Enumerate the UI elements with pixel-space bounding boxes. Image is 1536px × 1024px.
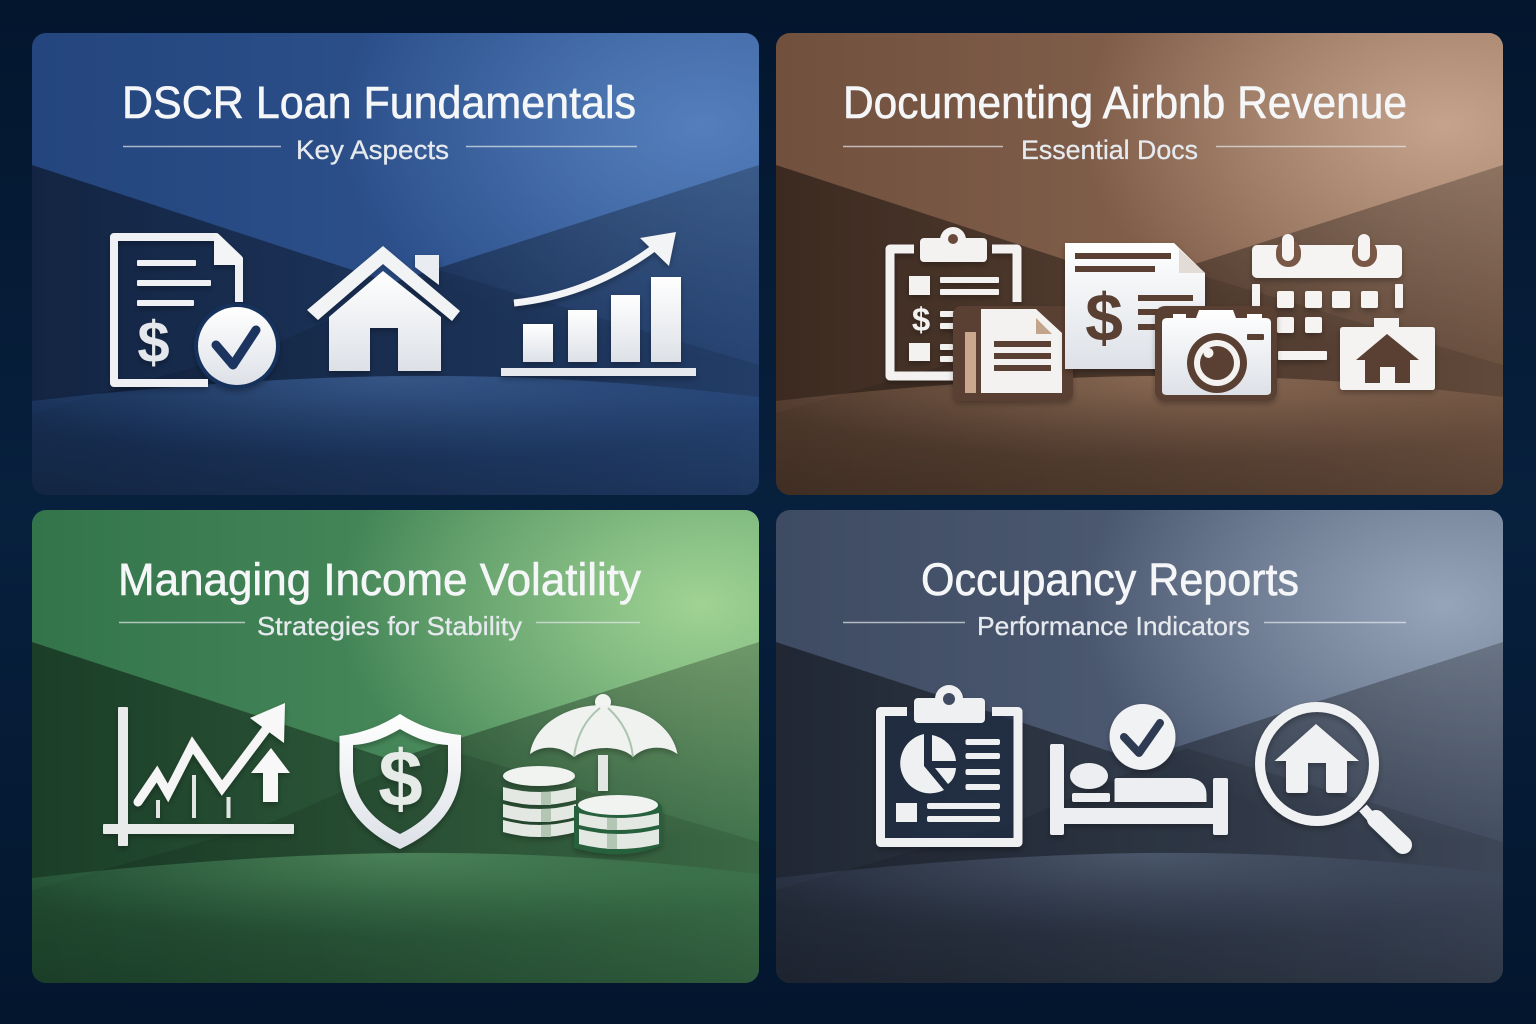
icon: umbrella over coins: [503, 694, 678, 854]
heading: Documenting Airbnb Revenue: Documenting Airbnb Revenue: [843, 77, 1407, 128]
icon: clipboard report with pie chart: [880, 685, 1018, 842]
icon: house: [307, 246, 460, 371]
panel background: brown: [776, 33, 1503, 513]
icon: volatile line chart with arrows: [103, 703, 294, 846]
icon: bed with check: [1050, 704, 1228, 835]
icon: shield with dollar: $: [378, 734, 423, 823]
panel: Occupancy Reports: [776, 510, 1503, 990]
icon: calendar: [1252, 234, 1403, 360]
panel: Documenting Airbnb Revenue: [776, 33, 1503, 513]
heading: Managing Income Volatility: Managing Income Volatility: [118, 554, 641, 605]
icon: shield with dollar: [340, 714, 461, 849]
icon: income statement: [1065, 243, 1205, 369]
panel background: slate: [776, 510, 1503, 990]
subheading: Key Aspects: Key Aspects: [296, 135, 449, 165]
panel: DSCR Loan Fundamentals: [32, 33, 759, 513]
icon: loan document with dollar and check: $: [137, 310, 170, 375]
icon: magnifying glass over house: [1260, 707, 1403, 845]
icon: income statement: $: [1085, 280, 1123, 356]
panel: Managing Income Volatility: [32, 510, 759, 990]
heading: Occupancy Reports: Occupancy Reports: [921, 554, 1299, 605]
panel background: blue: [32, 33, 759, 513]
icon: loan document with dollar and check: [114, 233, 280, 389]
icon: rising bar chart with arrow: [501, 232, 696, 376]
subheading: Strategies for Stability: Strategies for Stability: [257, 611, 522, 641]
heading: DSCR Loan Fundamentals: DSCR Loan Fundamentals: [122, 77, 636, 128]
subheading: Performance Indicators: Performance Indicators: [977, 611, 1250, 641]
icon: rental house card: [1340, 318, 1435, 390]
icon: receipt page: [953, 306, 1073, 401]
subheading: Essential Docs: Essential Docs: [1021, 135, 1198, 165]
icon: clipboard checklist: $: [912, 301, 930, 338]
panel background: green: [32, 510, 759, 990]
icon: clipboard checklist: [890, 227, 1017, 376]
icon: camera: [1155, 306, 1277, 401]
